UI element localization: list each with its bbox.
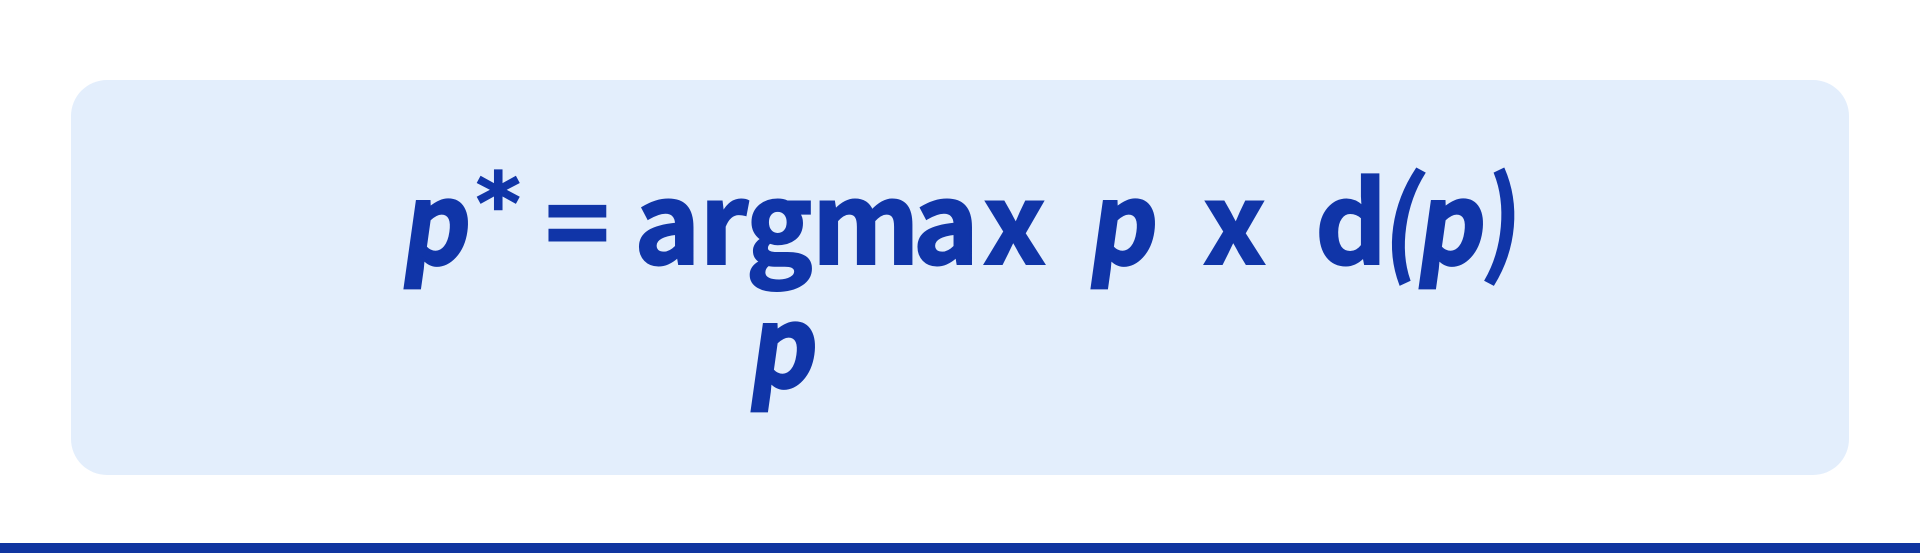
bottom accent bar (0, 543, 1920, 553)
formula: p* = argmax p x d(p): p (395, 136, 484, 297)
formula: p* = argmax p x d(p) (395, 133, 1529, 297)
formula: p* = argmax p x d(p): x (1203, 135, 1266, 297)
formula: p* = argmax p x d(p): ) (1479, 133, 1529, 295)
formula: p* = argmax p x d(p): p (1410, 136, 1499, 297)
formula: p* = argmax p x d(p): d (1315, 135, 1387, 297)
formula: p* = argmax p x d(p): = (546, 150, 609, 285)
formula: p* = argmax p x d(p): argmax (634, 135, 1045, 297)
formula: p* = argmax p x d(p): p (1082, 136, 1171, 297)
panel: formula background (71, 80, 1849, 475)
formula: p* = argmax p x d(p): ( (1376, 133, 1435, 295)
formula subscript: p: p (742, 259, 831, 420)
formula: p* = argmax p x d(p): * (476, 155, 520, 254)
